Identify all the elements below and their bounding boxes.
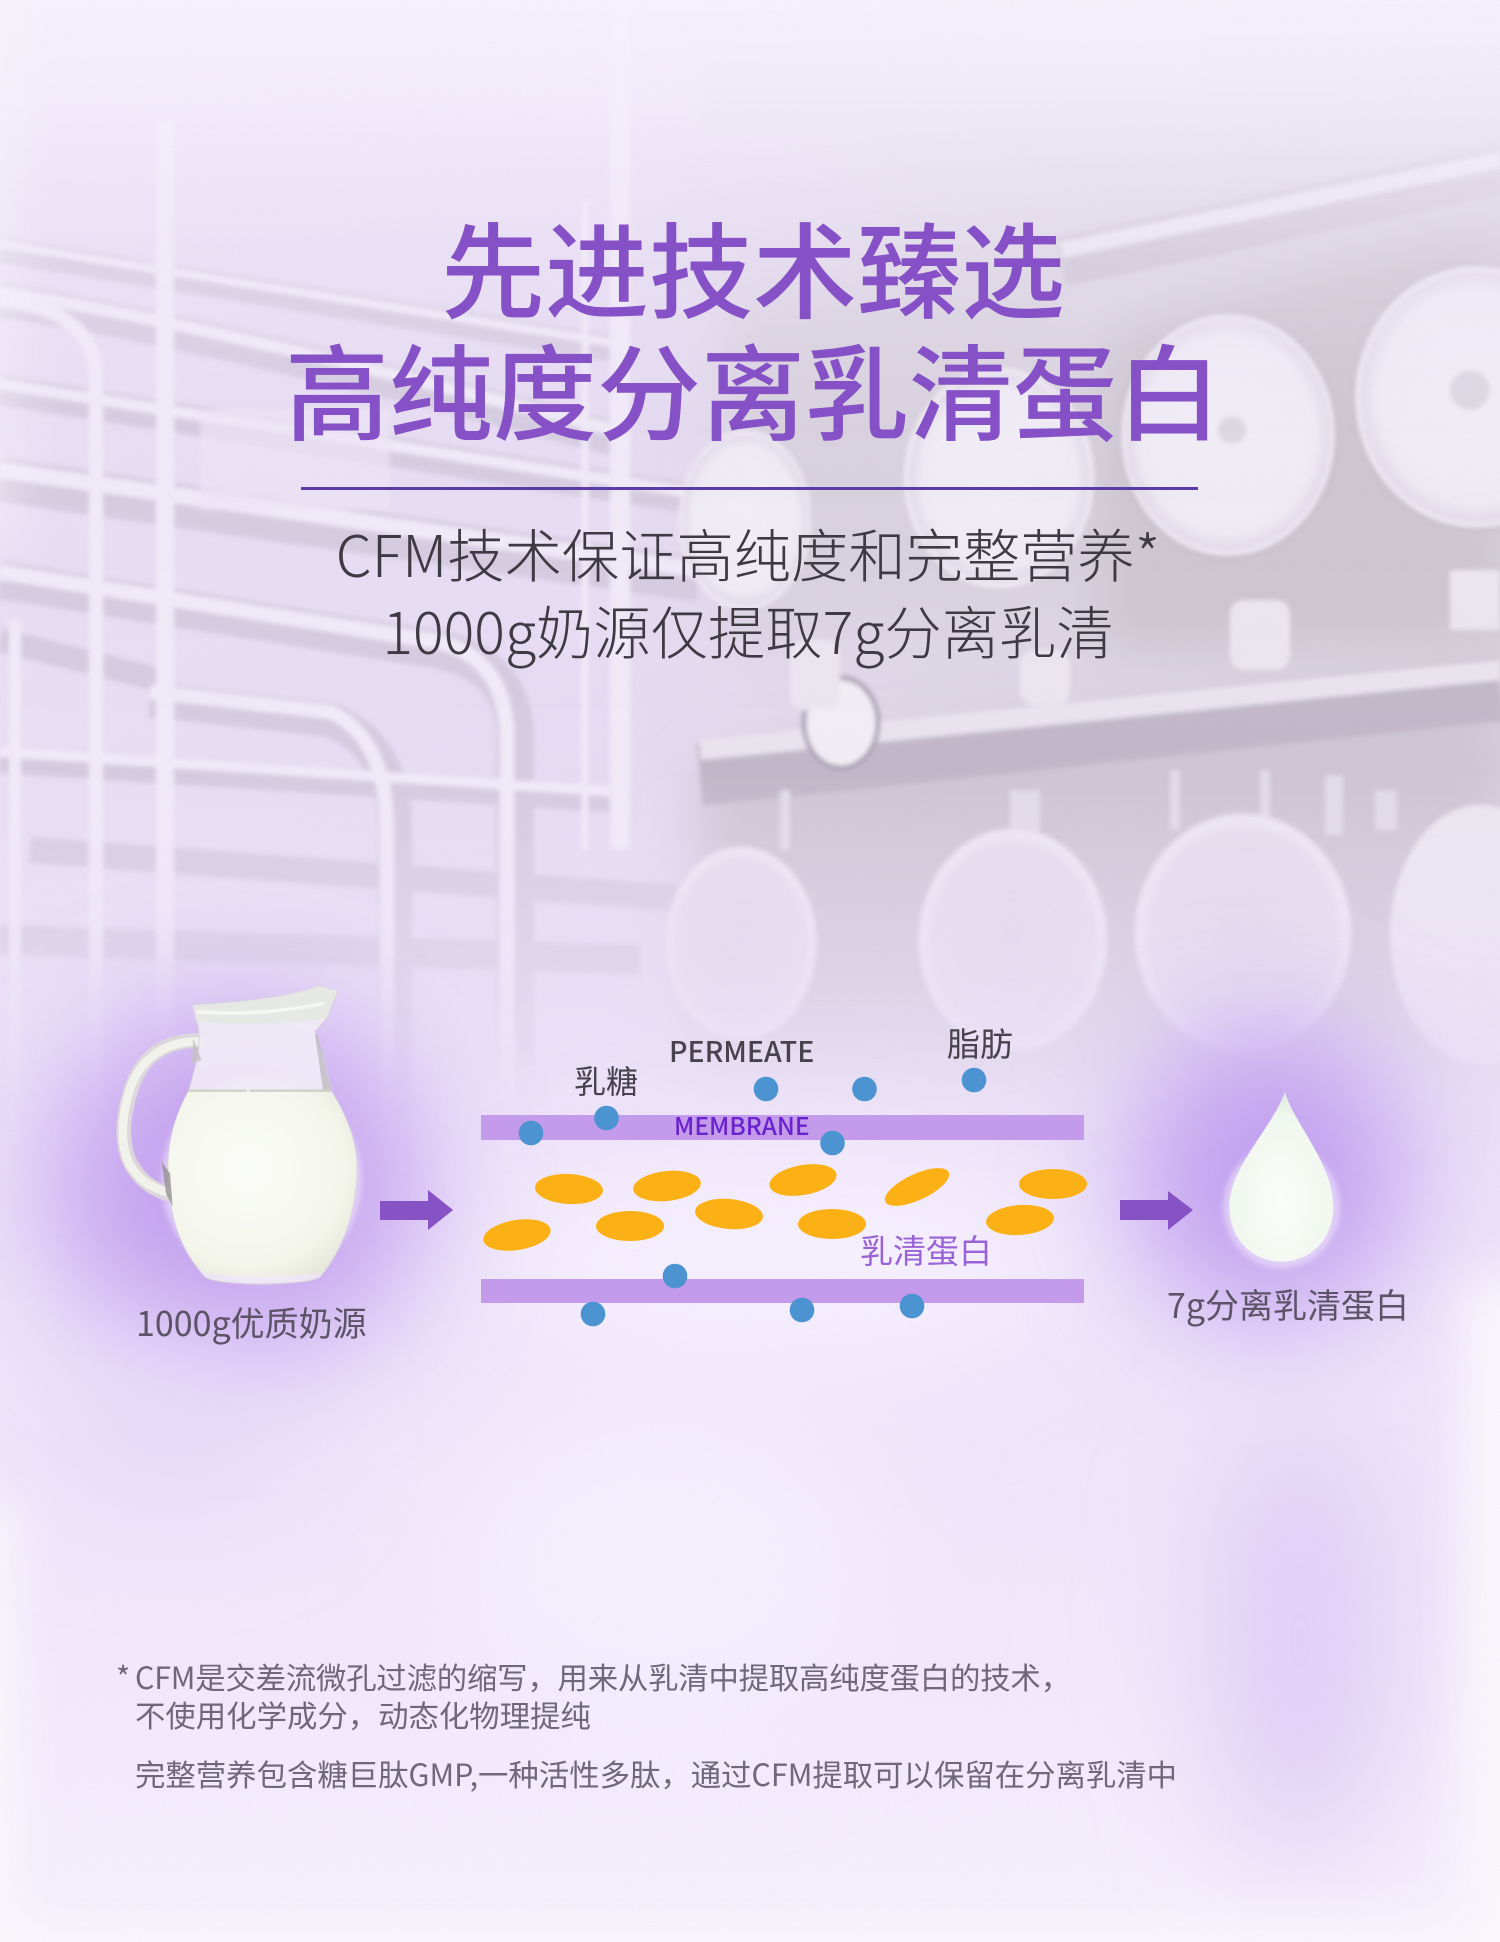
footnote: * xyxy=(116,1654,130,1698)
footnote: CFM是交差流微孔过滤的缩写，用来从乳清中提取高纯度蛋白的技术， xyxy=(135,1654,1071,1698)
left pipes xyxy=(0,250,700,1200)
footnote: 完整营养包含糖巨肽GMP,一种活性多肽，通过CFM提取可以保留在分离乳清中 xyxy=(135,1751,1177,1795)
membrane bars xyxy=(481,1115,1084,1303)
permeate particles xyxy=(519,1068,986,1326)
title xyxy=(285,189,1221,462)
title: 先进技术臻选 xyxy=(441,189,1065,340)
soft dark masses xyxy=(700,210,1500,1200)
label: fat: 脂肪 xyxy=(947,1018,1013,1066)
gauge xyxy=(804,678,878,768)
divider xyxy=(301,487,1198,490)
upper wheels xyxy=(679,430,811,610)
subtitle xyxy=(336,511,1160,671)
subtitle: CFM技术保证高纯度和完整营养* xyxy=(336,511,1160,594)
label: PERMEATE: PERMEATE xyxy=(669,1030,814,1071)
glows xyxy=(480,1150,1080,1370)
footnote xyxy=(116,1654,1177,1795)
title: 高纯度分离乳清蛋白 xyxy=(285,311,1221,462)
label: MEMBRANE: MEMBRANE xyxy=(674,1108,810,1143)
label: lactose: 乳糖 xyxy=(574,1057,638,1103)
subtitle: 1000g奶源仅提取7g分离乳清 xyxy=(382,588,1114,671)
vertical strips behind lower wheels xyxy=(780,770,1397,850)
fittings xyxy=(1230,600,1290,670)
label: whey protein: 乳清蛋白 xyxy=(860,1225,992,1273)
footnote: 不使用化学成分，动态化物理提纯 xyxy=(135,1692,591,1736)
lower wheels xyxy=(665,846,817,1040)
whey protein particles xyxy=(481,1159,1087,1255)
right pipes xyxy=(700,690,1500,775)
label: 7g isolate: 7g分离乳清蛋白 xyxy=(1167,1279,1409,1328)
label: 1000g source: 1000g优质奶源 xyxy=(136,1297,367,1346)
